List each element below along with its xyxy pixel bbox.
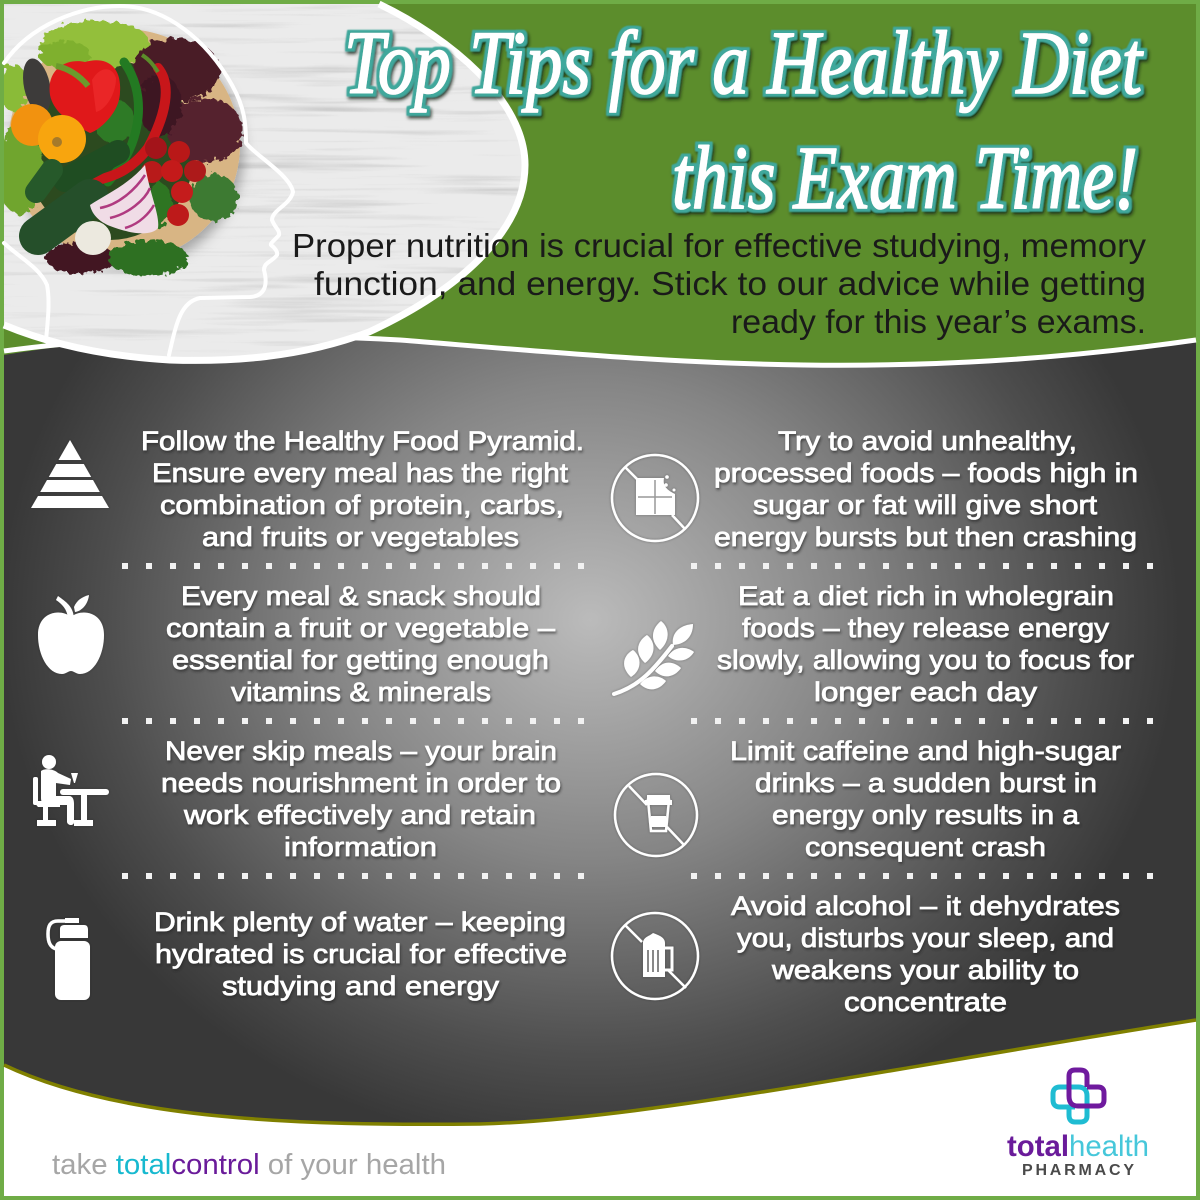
icon: water bottle (48, 918, 90, 1000)
tip: never skip meals: Never skip meals – your brain (165, 736, 557, 766)
icon: person at table (33, 755, 109, 826)
dotted divider (122, 873, 586, 879)
tip: drink water: Drink plenty of water – keeping (154, 907, 566, 937)
olive bottom curve (4, 1020, 1196, 1124)
head outline (4, 6, 293, 355)
logo: total health pharmacy (1007, 1070, 1149, 1179)
tip: never skip meals: information (284, 832, 437, 862)
dotted divider (691, 563, 1155, 569)
footer tagline: take totalcontrol of your health (52, 1149, 446, 1181)
photo bubble with head outline and vegetables (0, 0, 540, 380)
icon: no coffee cup (615, 774, 697, 856)
tip: wholegrain foods: slowly, allowing you to focus for (717, 645, 1134, 675)
logo: total health pharmacy: totalhealth (1007, 1130, 1149, 1163)
tip: healthy food pyramid: and fruits or vegetables (202, 522, 519, 552)
tip: drink water: studying and energy (222, 971, 500, 1001)
tip: wholegrain foods: Eat a diet rich in wholegrain (738, 581, 1114, 611)
tip: limit caffeine: consequent crash (805, 832, 1046, 862)
tip: fruit or vegetable: essential for getting enough (172, 645, 549, 675)
icon: no alcohol (612, 913, 698, 999)
tip: never skip meals: work effectively and retain (183, 800, 536, 830)
tip: drink water (154, 907, 567, 1001)
tip: limit caffeine: Limit caffeine and high-sugar (730, 736, 1121, 766)
tip: wholegrain foods: longer each day (814, 677, 1038, 707)
green header background (4, 4, 1196, 404)
tip: healthy food pyramid: combination of protein, carbs, (160, 490, 564, 520)
tip: avoid alcohol (731, 891, 1120, 1017)
title (344, 14, 1144, 228)
tip: wholegrain foods (717, 581, 1134, 707)
tip: healthy food pyramid: Follow the Healthy Food Pyramid. (141, 426, 584, 456)
tip: healthy food pyramid (141, 426, 584, 552)
dotted divider (691, 718, 1155, 724)
tip: fruit or vegetable: Every meal & snack should (181, 581, 541, 611)
dotted divider (691, 873, 1155, 879)
tip: avoid processed foods: processed foods – foods high in (714, 458, 1138, 488)
icon: wheat (614, 621, 694, 694)
tip: fruit or vegetable: contain a fruit or vegetable – (166, 613, 555, 643)
intro text (292, 227, 1147, 340)
intro text: function, and energy. Stick to our advice while getting (314, 265, 1146, 302)
vegetable plate (0, 20, 243, 276)
logo: total health pharmacy: PHARMACY (1022, 1162, 1134, 1179)
intro text: ready for this year’s exams. (731, 303, 1146, 340)
tip: avoid processed foods (714, 426, 1138, 552)
tip: avoid alcohol: Avoid alcohol – it dehydrates (731, 891, 1120, 921)
tip: avoid alcohol: you, disturbs your sleep, and (737, 923, 1114, 953)
tip: fruit or vegetable: vitamins & minerals (231, 677, 491, 707)
tip: avoid processed foods: sugar or fat will give short (753, 490, 1098, 520)
intro text: Proper nutrition is crucial for effective studying, memory (292, 227, 1147, 264)
icon: no processed food (612, 455, 698, 541)
white lower panel (4, 1000, 1196, 1196)
tip: limit caffeine: drinks – a sudden burst in (755, 768, 1097, 798)
tip: healthy food pyramid: Ensure every meal has the right (152, 458, 569, 488)
tip: avoid alcohol: concentrate (844, 987, 1007, 1017)
tip: fruit or vegetable (166, 581, 555, 707)
white top curve (4, 336, 1196, 365)
dotted divider (122, 563, 586, 569)
icon: food pyramid (31, 440, 109, 508)
tip: wholegrain foods: foods – they release energy (742, 613, 1110, 643)
tip: drink water: hydrated is crucial for effective (155, 939, 567, 969)
tip: limit caffeine (730, 736, 1121, 862)
dotted divider (122, 718, 586, 724)
tip: never skip meals: needs nourishment in order to (161, 768, 561, 798)
tip: limit caffeine: energy only results in a (772, 800, 1080, 830)
dark tips panel (4, 336, 1196, 1124)
tip: avoid processed foods: energy bursts but then crashing (714, 522, 1137, 552)
tip: never skip meals (161, 736, 561, 862)
icon: apple (38, 595, 104, 674)
tip: avoid processed foods: Try to avoid unhealthy, (778, 426, 1077, 456)
tip: avoid alcohol: weakens your ability to (771, 955, 1079, 985)
